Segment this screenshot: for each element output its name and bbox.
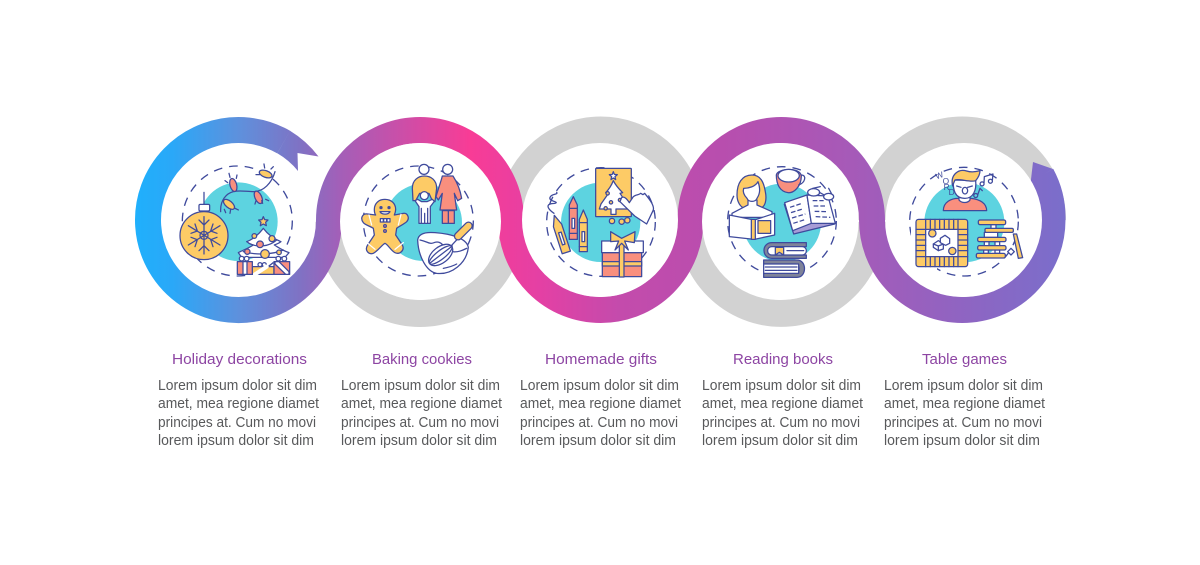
icon: family	[412, 164, 462, 223]
icon: wooden tower	[976, 220, 1023, 258]
column: table games	[884, 351, 1045, 449]
icon: singing person	[934, 169, 993, 211]
icon: board game	[916, 219, 968, 267]
column: baking cookies: Baking cookies	[372, 351, 472, 368]
icon: christmas tree with gifts	[237, 217, 290, 274]
icon: greeting card with tree	[596, 168, 632, 224]
text block: homemade gifts: lorem ipsum dolor sit dim	[520, 433, 676, 449]
text block: holiday decorations: lorem ipsum dolor sit dim	[158, 433, 314, 449]
text block: baking cookies	[341, 378, 502, 449]
icon: drawing hand	[620, 193, 653, 224]
icon: gingerbread man	[362, 199, 408, 254]
text block: reading books: amet, mea regione diamet	[702, 396, 863, 412]
column: baking cookies	[341, 351, 502, 449]
icon: holiday decorations	[180, 164, 292, 276]
text block: holiday decorations	[158, 378, 319, 449]
text block: baking cookies: principes at. Cum no movi	[341, 415, 499, 431]
grey background ribbon	[329, 130, 1052, 313]
column: homemade gifts	[520, 351, 681, 449]
text block: reading books: Lorem ipsum dolor sit dim	[702, 378, 861, 394]
text: word: D	[949, 187, 955, 197]
column: holiday decorations	[158, 351, 319, 449]
icon: notebook and glasses	[784, 187, 835, 234]
column: table games: Table games	[922, 351, 1007, 368]
text block: homemade gifts	[520, 378, 681, 449]
column: reading books: Reading books	[733, 351, 833, 368]
text block: table games	[884, 378, 1045, 449]
text block: table games: lorem ipsum dolor sit dim	[884, 433, 1040, 449]
text: word: W	[934, 169, 945, 181]
text: word: O	[943, 176, 950, 186]
icon: homemade gifts	[547, 168, 655, 277]
icon: string lights	[221, 164, 275, 213]
text block: reading books: principes at. Cum no movi	[702, 415, 860, 431]
text block: table games: principes at. Cum no movi	[884, 415, 1042, 431]
text block: holiday decorations: amet, mea regione diamet	[158, 396, 319, 412]
icon: table games	[910, 167, 1023, 276]
text block: reading books: lorem ipsum dolor sit dim	[702, 433, 858, 449]
icon: tea cup	[776, 169, 805, 193]
icon: reading books	[728, 167, 836, 277]
white inner discs	[340, 143, 1042, 300]
icon: open book	[729, 213, 775, 239]
column: homemade gifts: Homemade gifts	[545, 351, 657, 368]
text block: homemade gifts: Lorem ipsum dolor sit dim	[520, 378, 679, 394]
gradient ribbon with arrow tail	[148, 130, 1053, 310]
icon: woman reading	[732, 175, 772, 217]
text block: table games: Lorem ipsum dolor sit dim	[884, 378, 1043, 394]
text block: holiday decorations: principes at. Cum no movi	[158, 415, 316, 431]
icon: baking cookies	[362, 164, 474, 276]
icon: crayons	[548, 192, 587, 254]
column: holiday decorations: Holiday decorations	[172, 351, 307, 368]
text block: baking cookies: amet, mea regione diamet	[341, 396, 502, 412]
icon: mixing bowl and whisk	[418, 221, 474, 273]
column: reading books	[702, 351, 863, 449]
text block: reading books	[702, 378, 863, 449]
text block: table games: amet, mea regione diamet	[884, 396, 1045, 412]
icon: stack of books	[764, 243, 806, 277]
text block: baking cookies: lorem ipsum dolor sit dim	[341, 433, 497, 449]
icon: gift box	[602, 232, 643, 277]
icon: music notes	[974, 174, 993, 198]
icon: bauble	[180, 192, 228, 260]
text: word	[934, 169, 955, 197]
text block: baking cookies: Lorem ipsum dolor sit dim	[341, 378, 500, 394]
text block: homemade gifts: amet, mea regione diamet	[520, 396, 681, 412]
text: word: R	[944, 182, 950, 192]
text block: homemade gifts: principes at. Cum no movi	[520, 415, 678, 431]
text block: holiday decorations: Lorem ipsum dolor sit dim	[158, 378, 317, 394]
